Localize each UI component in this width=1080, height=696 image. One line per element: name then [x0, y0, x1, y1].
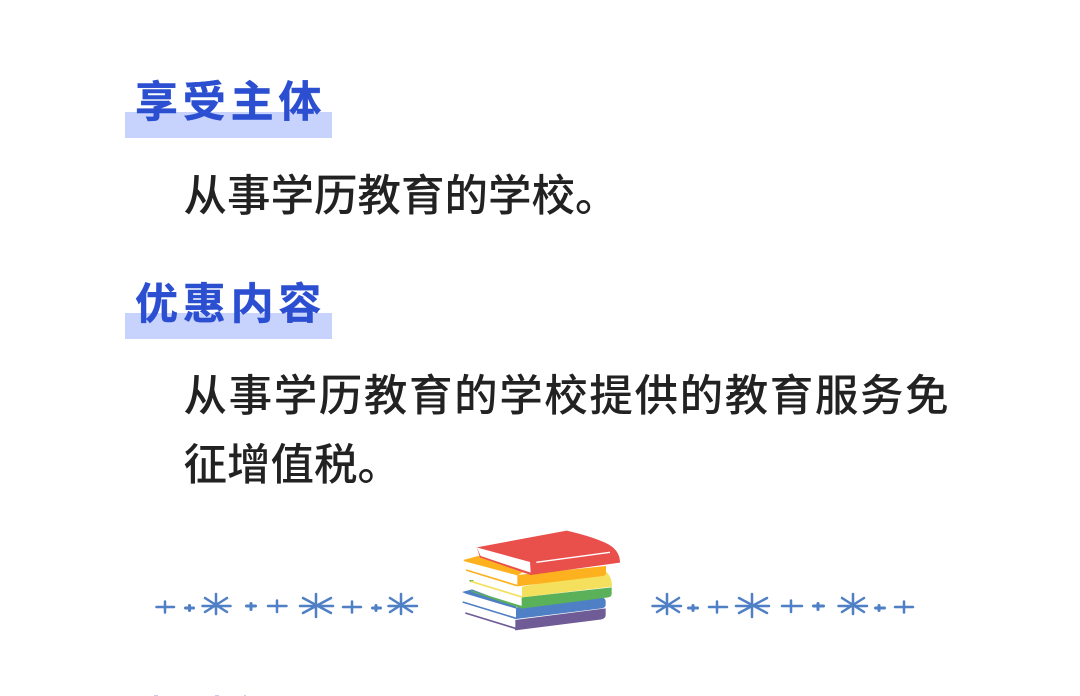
- text: benefit content: 从事学历教育的学校提供的教育服务免: [184, 373, 950, 421]
- text: beneficiary: 从事学历教育的学校。: [184, 173, 618, 221]
- decoration: left sparkle row: [155, 592, 418, 618]
- faint marks of clipped next heading: [154, 695, 246, 696]
- heading: 享受主体: 享受主体: [135, 79, 326, 127]
- text: benefit content: 征增值税。: [184, 442, 401, 490]
- text: benefit content: [184, 373, 950, 490]
- heading: 优惠内容: 优惠内容: [135, 281, 326, 329]
- icon: stack of books: [462, 530, 620, 630]
- decoration: right sparkle row: [651, 592, 914, 618]
